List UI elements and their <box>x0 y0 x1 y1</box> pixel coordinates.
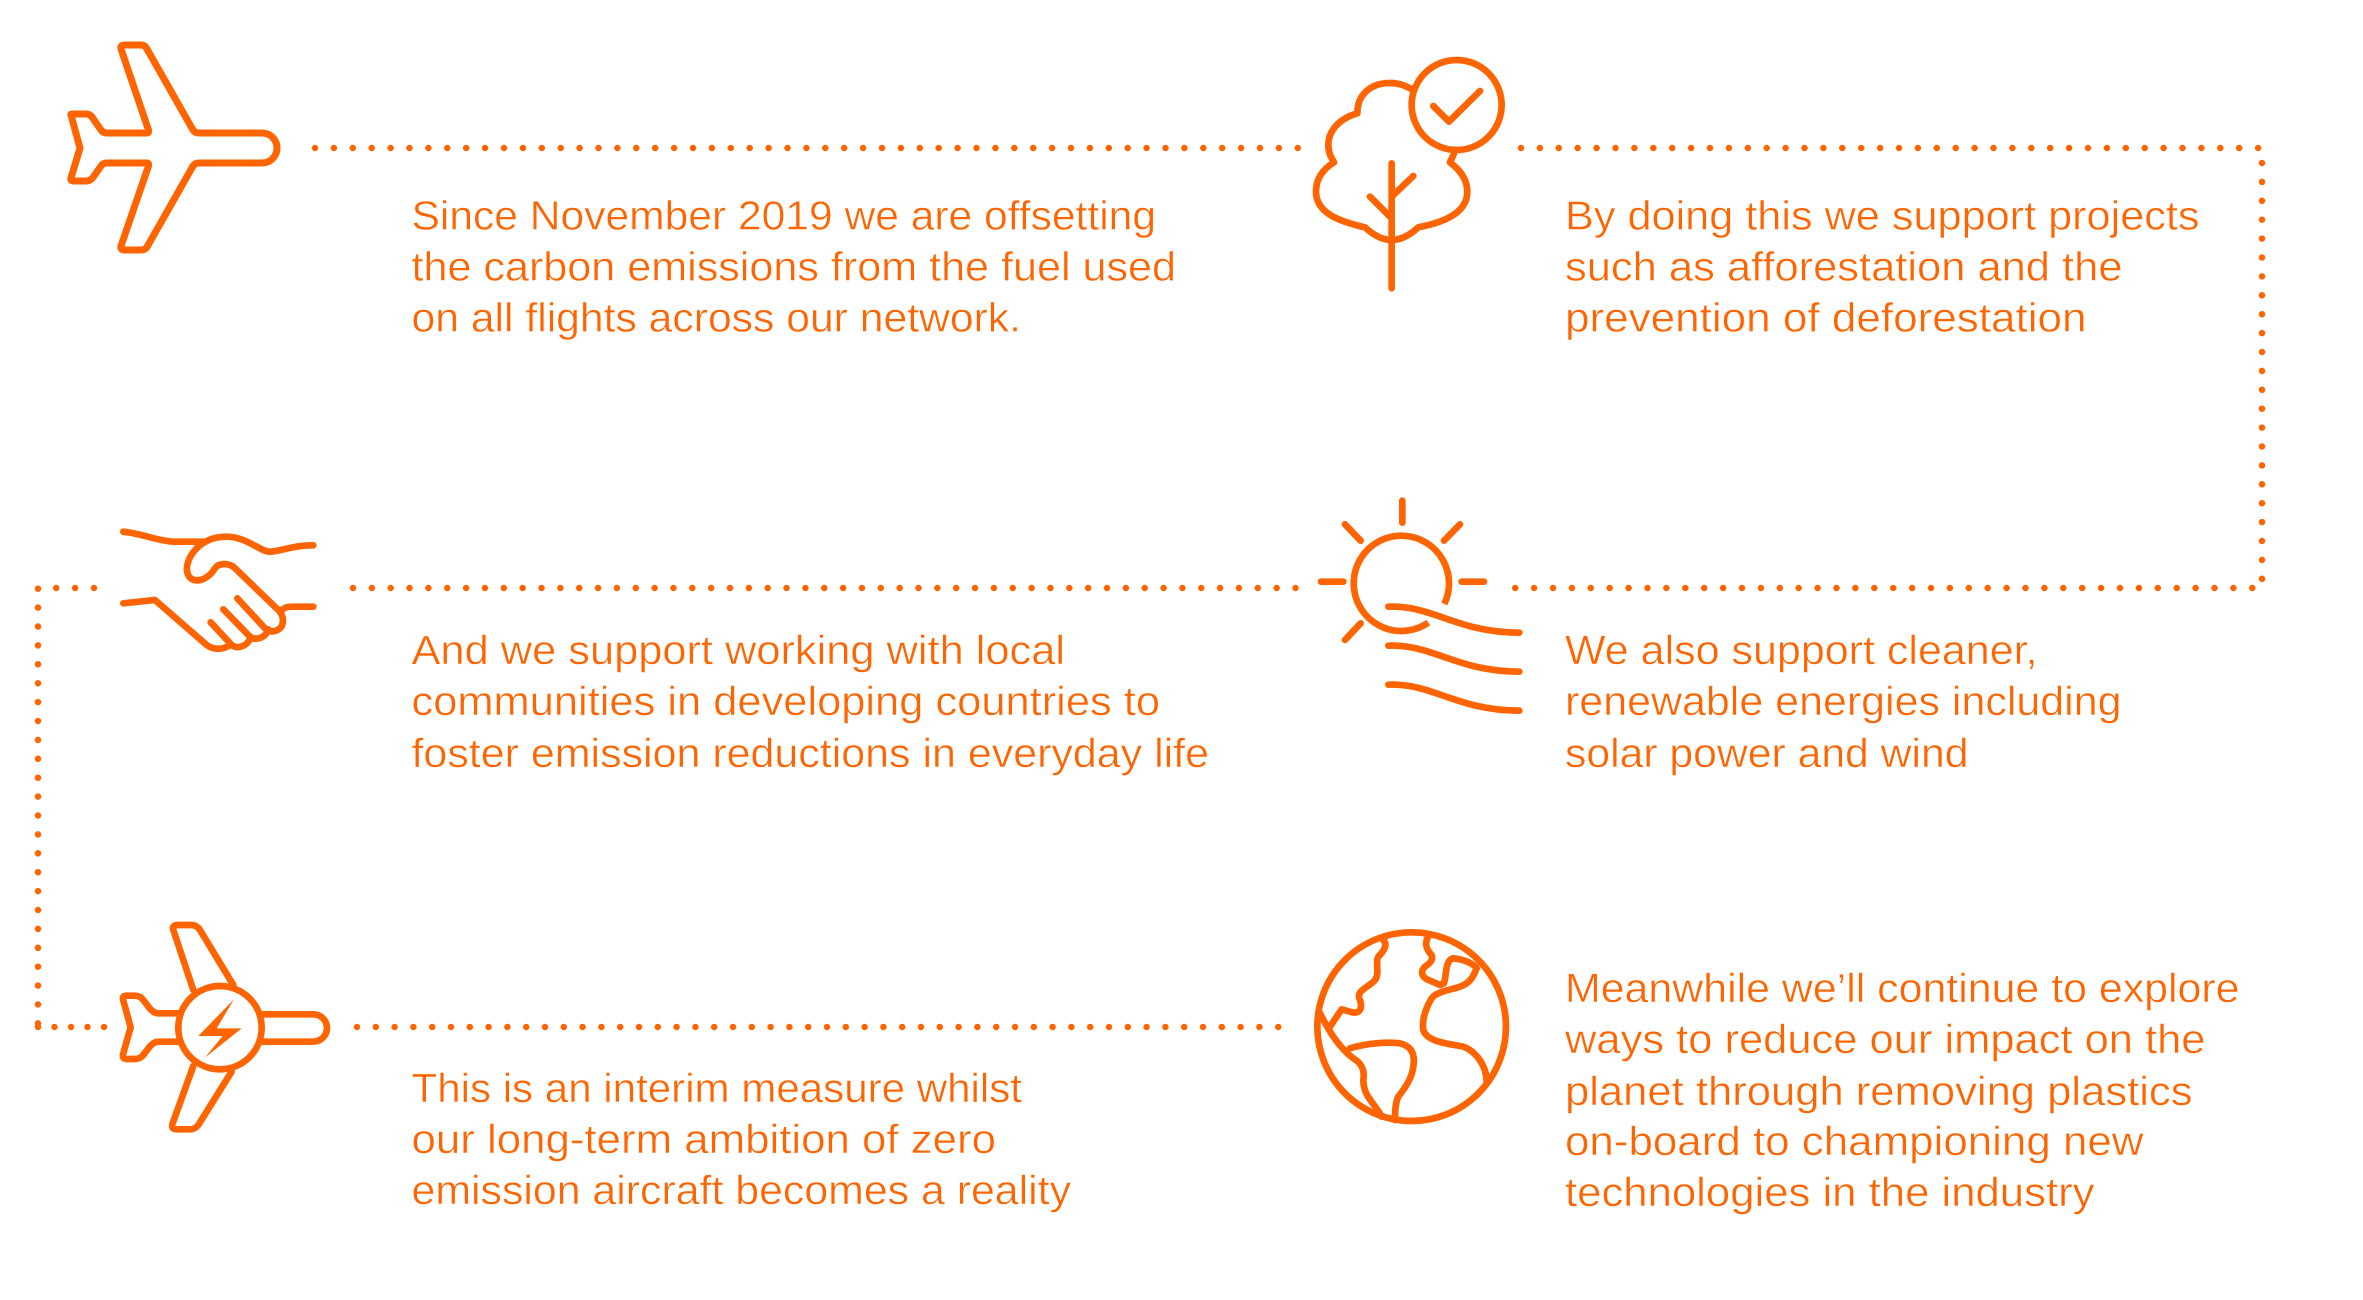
icon: sun and wind <box>1321 501 1519 711</box>
icon: globe <box>1317 932 1506 1121</box>
text block: offsetting since November 2019 <box>412 192 1176 340</box>
text block: renewable energies <box>1565 627 2122 776</box>
text block: supported projects: prevention of deforestation <box>1565 294 2086 340</box>
text block: continuing to explore: on-board to championing new <box>1565 1118 2144 1164</box>
dotted connector: bottom row left stub <box>38 1024 105 1030</box>
text block: interim measure: emission aircraft becomes a reality <box>412 1167 1072 1213</box>
text block: offsetting since November 2019: on all flights across our network. <box>412 294 1021 340</box>
text block: supported projects: such as afforestation and the <box>1565 244 2122 290</box>
dotted connector: top row left <box>315 145 1300 151</box>
text block: offsetting since November 2019: Since November 2019 we are offsetting <box>412 192 1156 238</box>
text block: continuing to explore <box>1564 965 2240 1215</box>
text block: local communities: communities in developing countries to <box>412 678 1160 724</box>
icon: aeroplane <box>71 45 277 250</box>
icon: handshake <box>123 532 313 649</box>
text block: continuing to explore: Meanwhile we’ll continue to explore <box>1565 965 2240 1011</box>
text block: offsetting since November 2019: the carbon emissions from the fuel used <box>412 244 1176 290</box>
text block: continuing to explore: planet through removing plastics <box>1565 1068 2192 1114</box>
text block: supported projects <box>1565 192 2200 340</box>
dotted connector: top row right and right side <box>1512 148 2262 588</box>
icon: tree with check mark <box>1316 60 1502 288</box>
text block: local communities: And we support working with local <box>412 627 1065 673</box>
text block: renewable energies: We also support cleaner, <box>1565 627 2038 673</box>
text block: interim measure: This is an interim measure whilst <box>412 1065 1023 1111</box>
text block: interim measure: our long-term ambition of zero <box>412 1116 996 1162</box>
dotted connector: middle row <box>353 585 1296 591</box>
dotted connector: left side <box>38 588 94 1027</box>
text block: local communities <box>412 627 1209 776</box>
text block: renewable energies: solar power and wind <box>1565 730 1968 776</box>
dotted connector: bottom row main <box>357 1024 1279 1030</box>
icon: electric aeroplane <box>123 925 327 1129</box>
text block: local communities: foster emission reductions in everyday life <box>412 730 1209 776</box>
text block: continuing to explore: ways to reduce our impact on the <box>1564 1016 2206 1062</box>
text block: renewable energies: renewable energies including <box>1565 678 2122 724</box>
text block: interim measure <box>412 1065 1072 1213</box>
text block: continuing to explore: technologies in the industry <box>1565 1169 2095 1215</box>
text block: supported projects: By doing this we support projects <box>1565 192 2200 238</box>
